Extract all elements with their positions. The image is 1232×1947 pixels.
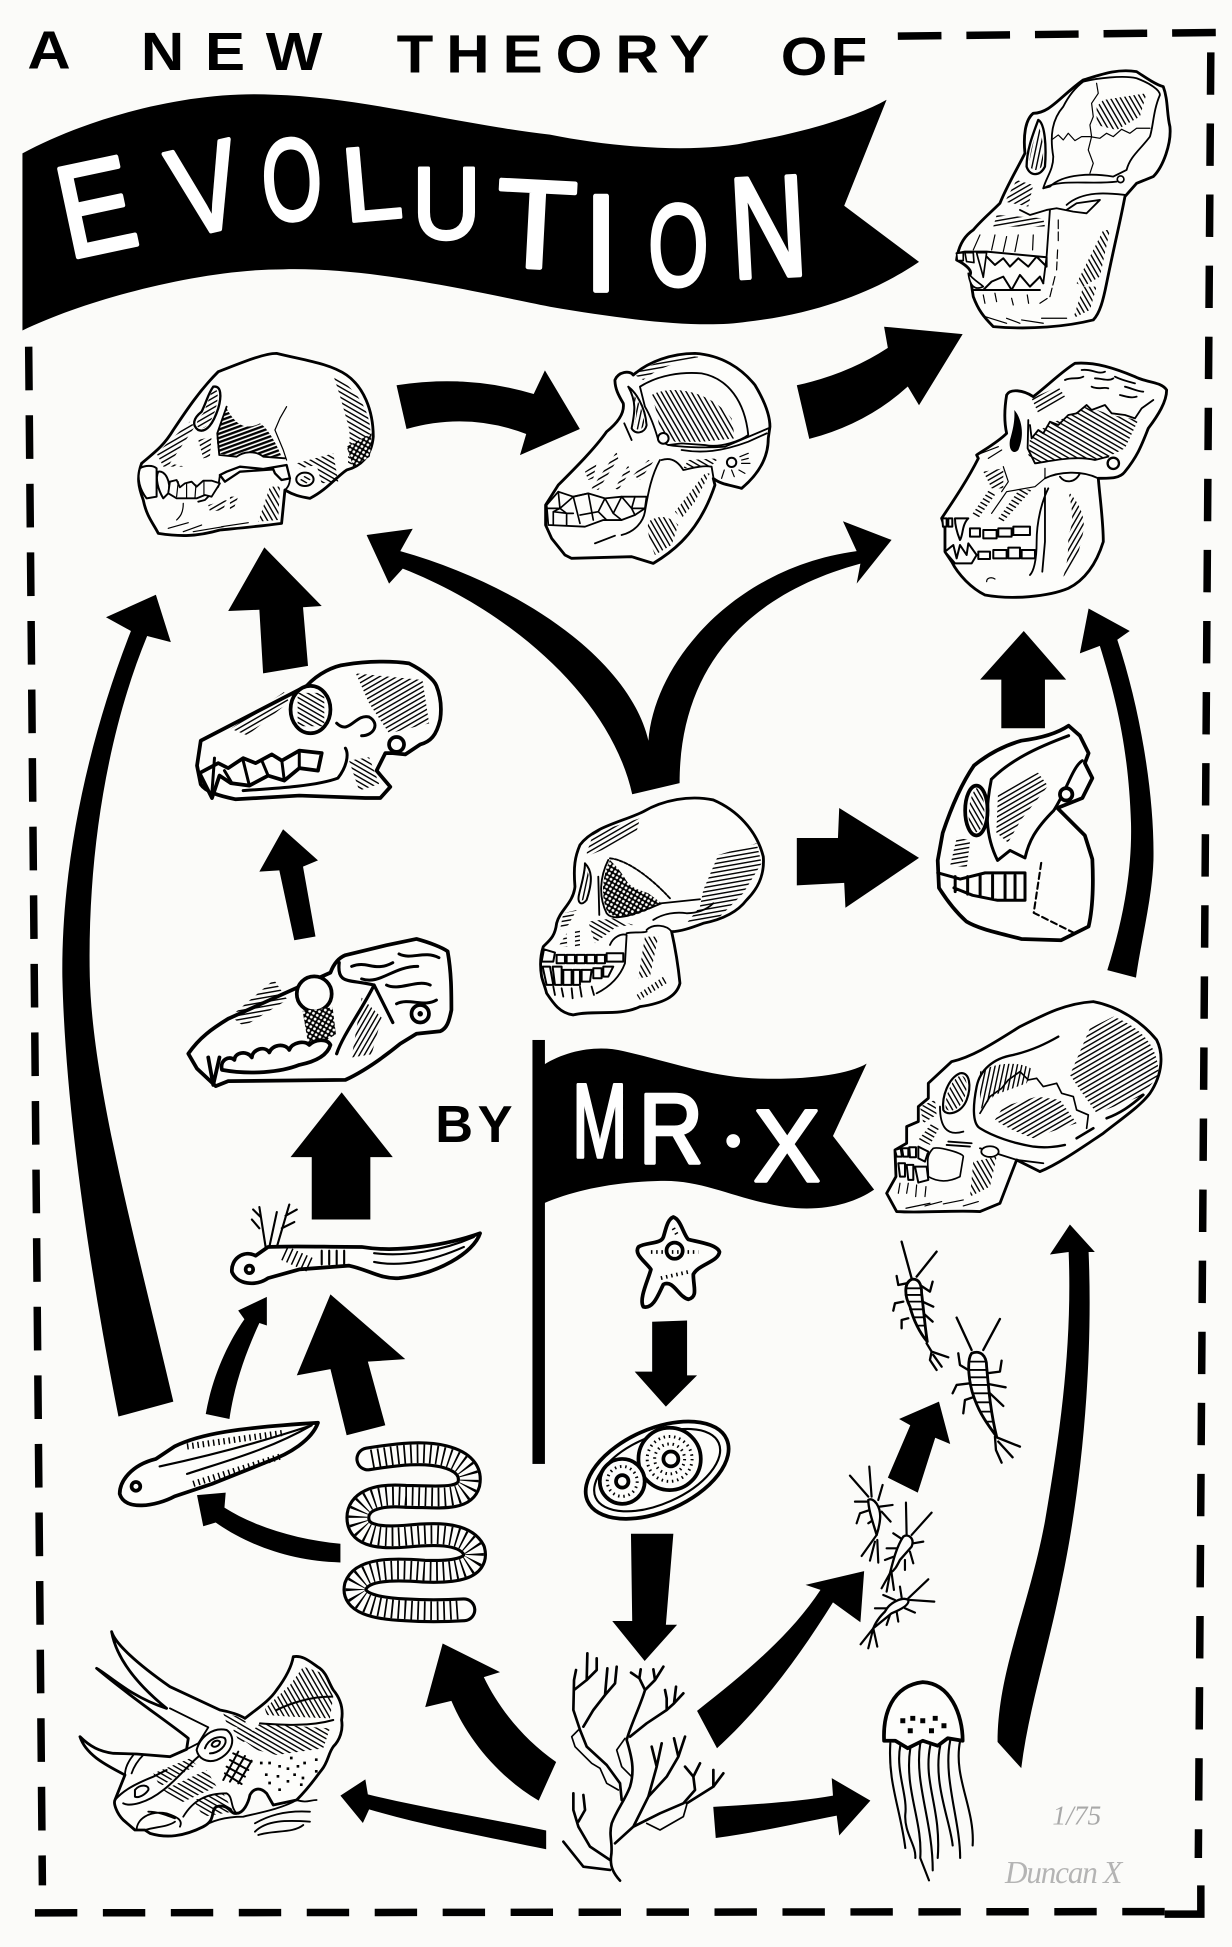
banner: evolution: L xyxy=(337,124,406,245)
title: a new theory of: A xyxy=(27,21,71,81)
organism: segmented worm xyxy=(355,1454,475,1611)
flag: by mr x: X xyxy=(754,1090,820,1204)
arrow: bugs to silverfish xyxy=(888,1402,950,1493)
skull: elongated alien xyxy=(887,1002,1161,1212)
arrow: up to skull 4 xyxy=(291,1092,393,1220)
arrow: jellyfish to alien skull xyxy=(998,1225,1095,1768)
organism: dividing cell xyxy=(571,1402,743,1539)
organism: triceratops xyxy=(80,1632,342,1836)
organism: tadpole fish xyxy=(120,1423,318,1505)
arrow: skull 1 to skull 2 xyxy=(397,370,580,455)
arrow: central skull to right skull xyxy=(797,808,919,908)
arrow: seaweed to triceratops xyxy=(340,1779,546,1849)
skull: right mid xyxy=(938,726,1093,940)
arrow: seaweed to bugs xyxy=(697,1571,864,1748)
organism: jellyfish xyxy=(884,1682,973,1880)
banner: evolution: U xyxy=(412,146,481,260)
flag: by mr x xyxy=(532,1040,874,1464)
title: a new theory of: NEW xyxy=(141,22,323,82)
arrow: seaweed to jellyfish xyxy=(713,1778,870,1838)
banner: evolution: V xyxy=(157,114,255,265)
arrow: worm to lancelet xyxy=(297,1294,405,1435)
organism: seaweed xyxy=(563,1653,723,1881)
arrow: long left curve xyxy=(62,595,173,1417)
arrow: right curve xyxy=(1080,609,1154,978)
arrow: up to skull 3 xyxy=(259,829,318,940)
banner: evolution: O xyxy=(648,181,708,310)
signature: duncan x: Duncan X xyxy=(1004,1855,1124,1890)
title: a new theory of xyxy=(27,21,867,87)
arrow: cell to seaweed xyxy=(612,1534,677,1661)
arrow: star to cell xyxy=(635,1321,697,1407)
arrow: worm to fish xyxy=(197,1493,340,1562)
skull: upper centre xyxy=(546,353,770,563)
arrow: fork from central skull xyxy=(367,521,892,794)
banner: evolution xyxy=(22,94,919,330)
banner: evolution: N xyxy=(726,145,811,309)
skull: upper left xyxy=(139,353,373,536)
byline: by: BY xyxy=(435,1096,513,1154)
banner: evolution: I xyxy=(584,166,618,320)
skull: right gorilla xyxy=(942,363,1167,597)
edition number: 1/75: 1/75 xyxy=(1052,1800,1101,1830)
banner: evolution: O xyxy=(258,113,325,246)
arrow: up to gorilla skull xyxy=(980,631,1066,728)
flag: by mr x: M xyxy=(572,1063,627,1180)
title: a new theory of: OF xyxy=(781,27,867,87)
organism: amoeba star xyxy=(637,1217,719,1307)
skull: central hominid xyxy=(541,798,763,1015)
arrow: seaweed to worm xyxy=(425,1643,556,1801)
title: a new theory of: THEORY xyxy=(397,24,710,85)
flag: by mr x: R xyxy=(638,1074,703,1185)
arrow: up to skull 1 xyxy=(228,547,322,673)
skull: left mid mammal xyxy=(197,662,441,799)
banner: evolution: E xyxy=(44,128,148,286)
organism: silverfish and larvae xyxy=(850,1242,1020,1648)
skull: left lower reptile xyxy=(188,939,451,1086)
arrow: fish to lancelet xyxy=(206,1297,267,1419)
skull: top right chimpanzee xyxy=(957,71,1170,328)
organism: lancelet with gills xyxy=(232,1205,480,1283)
banner: evolution: T xyxy=(493,153,580,297)
arrow: skull 2 to top skull xyxy=(797,327,963,439)
